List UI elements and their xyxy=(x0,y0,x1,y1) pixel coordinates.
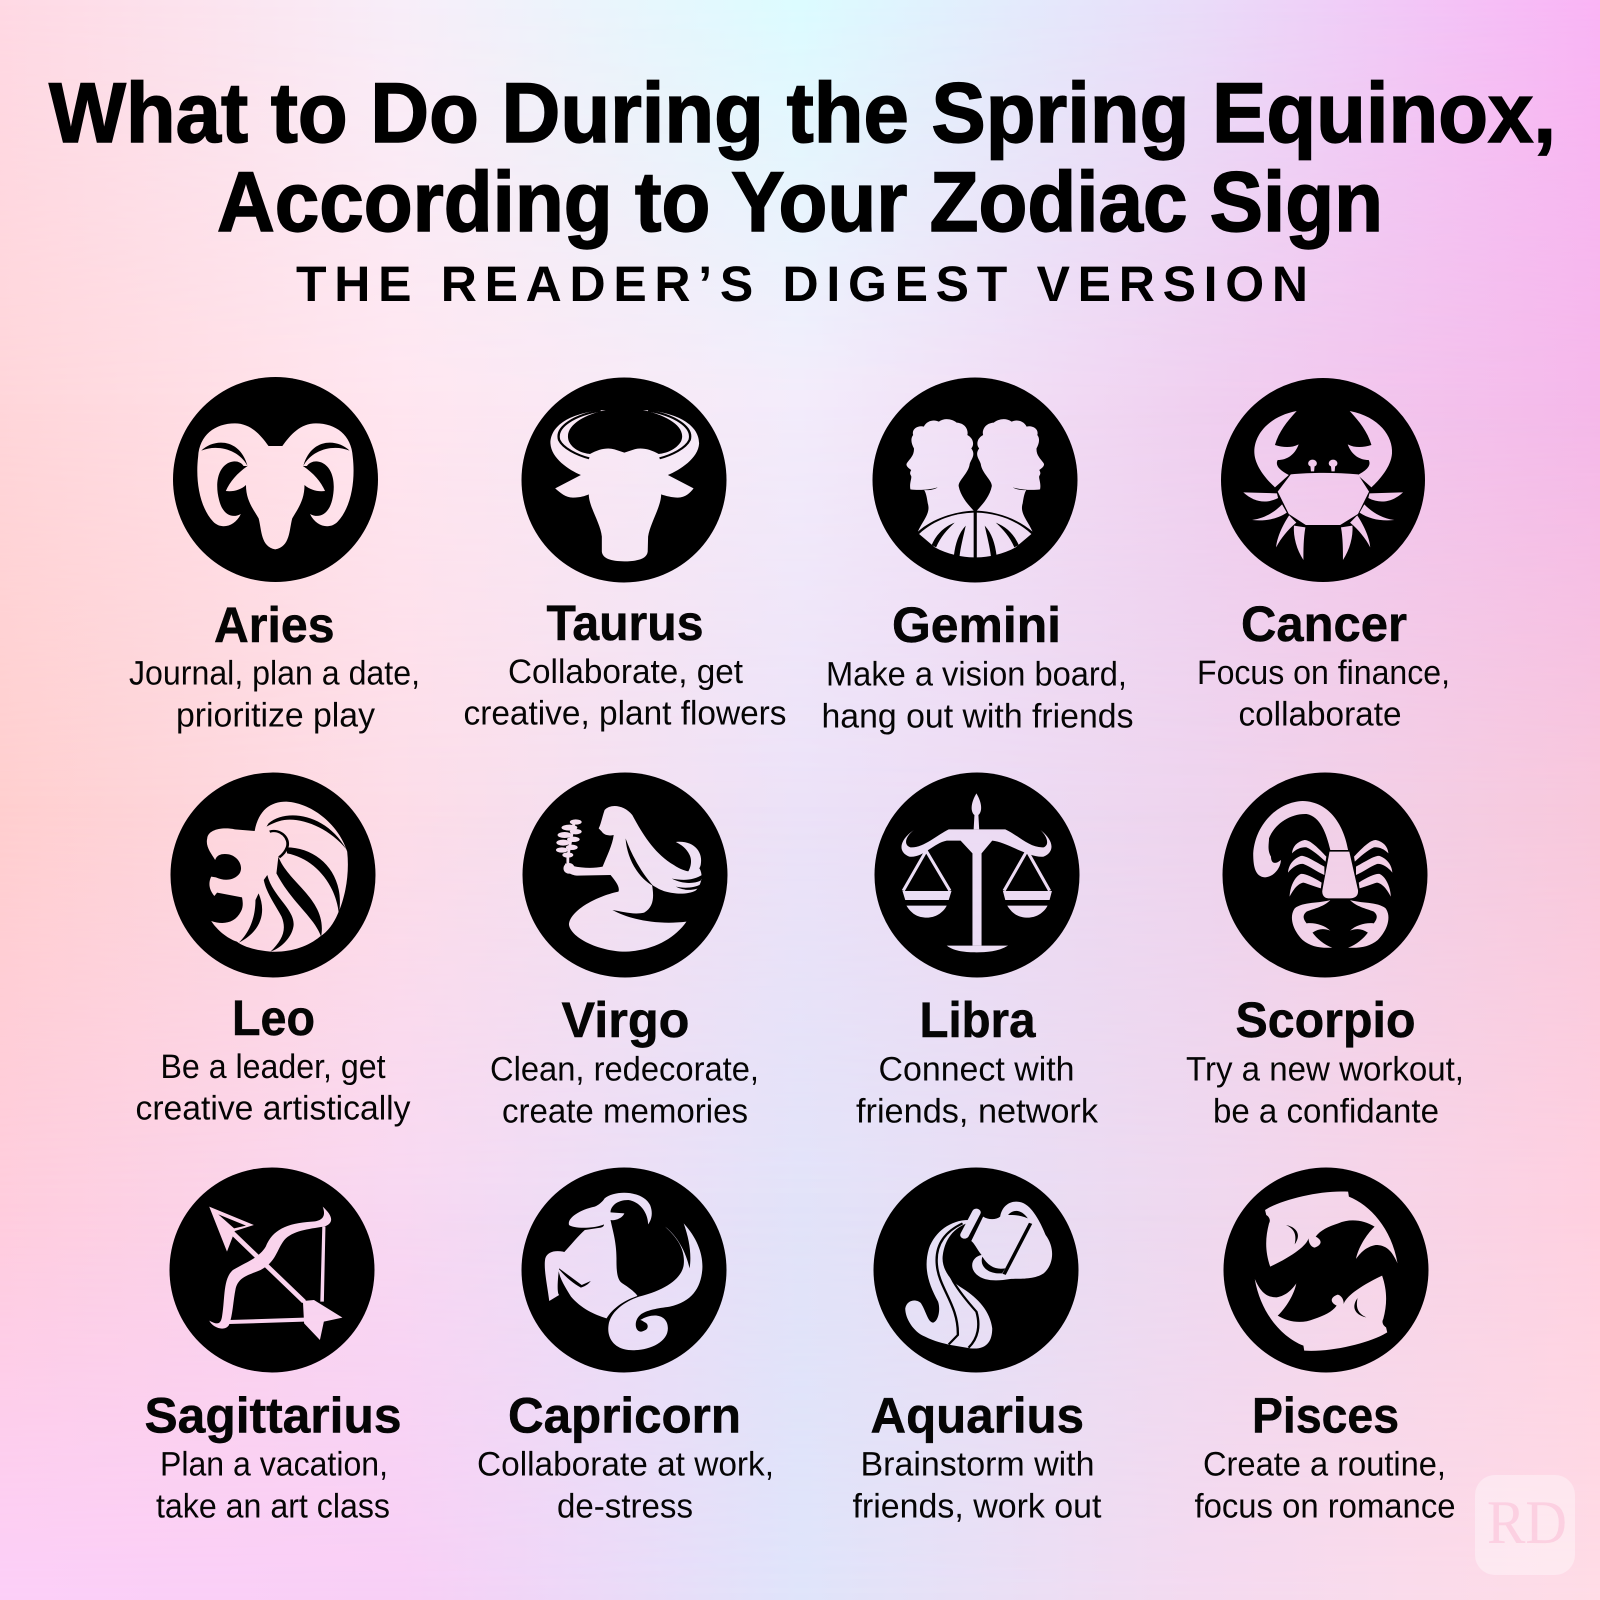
description: Aquarius: friends, work out xyxy=(852,1488,1102,1526)
name: Virgo: Virgo xyxy=(562,992,690,1048)
name: Taurus: Taurus xyxy=(546,595,704,651)
panel: Gemini xyxy=(822,378,1134,736)
description: Libra xyxy=(856,1050,1099,1130)
panel: Virgo xyxy=(490,772,759,1130)
description: Pisces xyxy=(1194,1446,1456,1526)
description: Gemini: Make a vision board, xyxy=(826,656,1127,694)
description: Aries: prioritize play xyxy=(176,696,375,734)
icon: two fish xyxy=(1224,1168,1428,1372)
description: Cancer: collaborate xyxy=(1238,696,1402,734)
name: Cancer: Cancer xyxy=(1241,596,1407,652)
description: Aquarius: Brainstorm with xyxy=(860,1446,1094,1484)
name: Capricorn: Capricorn xyxy=(508,1388,741,1444)
description: Taurus xyxy=(464,653,786,732)
description: Taurus: creative, plant flowers xyxy=(464,694,786,732)
description: Libra: Connect with xyxy=(878,1050,1074,1088)
name: Libra: Libra xyxy=(920,992,1037,1048)
panel: Leo xyxy=(136,772,410,1128)
panel: Scorpio xyxy=(1186,772,1464,1130)
description: Virgo: create memories xyxy=(502,1092,748,1130)
title xyxy=(49,66,1556,250)
icon: scorpion xyxy=(1222,772,1428,978)
description: Aries xyxy=(129,654,420,734)
subtitle: THE READER’S DIGEST VERSION xyxy=(296,256,1308,312)
description: Pisces: Create a routine, xyxy=(1203,1446,1446,1484)
panel: Libra xyxy=(856,772,1099,1130)
panel: Pisces xyxy=(1194,1168,1456,1526)
description: Capricorn: de-stress xyxy=(557,1488,693,1526)
logo: RD badge: RD xyxy=(1487,1489,1567,1557)
description: Pisces: focus on romance xyxy=(1194,1488,1456,1526)
description: Capricorn xyxy=(477,1446,774,1526)
description: Aries: Journal, plan a date, xyxy=(129,654,420,692)
description: Taurus: Collaborate, get xyxy=(508,653,744,691)
panel: Cancer xyxy=(1197,378,1450,734)
description: Sagittarius xyxy=(156,1446,390,1526)
description: Cancer xyxy=(1197,654,1450,734)
description: Virgo: Clean, redecorate, xyxy=(490,1050,759,1088)
description: Leo xyxy=(136,1048,410,1128)
name: Leo: Leo xyxy=(232,990,315,1046)
description: Sagittarius: take an art class xyxy=(156,1488,390,1526)
description: Cancer: Focus on finance, xyxy=(1197,654,1450,692)
icon: water jug xyxy=(874,1168,1078,1372)
icon: sea goat xyxy=(522,1168,726,1372)
icon: bow and arrow xyxy=(170,1168,374,1372)
name: Scorpio: Scorpio xyxy=(1236,992,1416,1048)
description: Scorpio xyxy=(1186,1050,1464,1130)
name: Sagittarius: Sagittarius xyxy=(144,1388,402,1444)
title: What to Do During the Spring Equinox, xyxy=(49,66,1556,161)
icon: scales xyxy=(874,772,1080,978)
icon: lion xyxy=(170,772,376,978)
icon: crab xyxy=(1221,378,1425,582)
title: According to Your Zodiac Sign xyxy=(217,155,1383,250)
description: Capricorn: Collaborate at work, xyxy=(477,1446,774,1484)
description: Gemini xyxy=(822,656,1134,736)
name: Aquarius: Aquarius xyxy=(870,1388,1084,1444)
description: Leo: creative artistically xyxy=(136,1090,410,1128)
icon: twins xyxy=(872,378,1078,582)
name: Gemini: Gemini xyxy=(892,597,1061,653)
description: Leo: Be a leader, get xyxy=(160,1048,386,1086)
panel: Aries xyxy=(129,377,420,734)
name: Aries: Aries xyxy=(214,597,334,653)
description: Aquarius xyxy=(852,1446,1102,1526)
logo: RD badge xyxy=(1475,1475,1575,1575)
panel: Aquarius xyxy=(852,1168,1102,1526)
description: Virgo xyxy=(490,1050,759,1130)
icon: bull xyxy=(522,378,726,582)
panel: Taurus xyxy=(464,378,786,732)
panel: Sagittarius xyxy=(144,1168,402,1526)
panel: Capricorn xyxy=(477,1168,774,1526)
description: Scorpio: be a confidante xyxy=(1213,1092,1439,1130)
description: Sagittarius: Plan a vacation, xyxy=(160,1446,388,1484)
description: Scorpio: Try a new workout, xyxy=(1186,1050,1464,1088)
icon: ram xyxy=(173,377,378,582)
description: Libra: friends, network xyxy=(856,1092,1099,1130)
description: Gemini: hang out with friends xyxy=(822,698,1134,736)
icon: maiden xyxy=(522,772,728,978)
name: Pisces: Pisces xyxy=(1252,1388,1399,1444)
